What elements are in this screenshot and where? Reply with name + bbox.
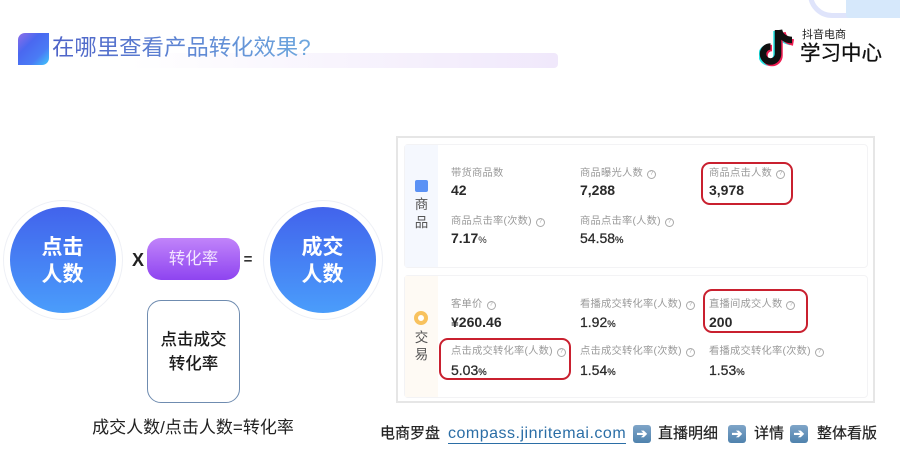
- section: 交易: [404, 275, 868, 398]
- metric: 商品曝光人数: 7,288: [580, 182, 615, 198]
- metric: 商品点击率(人数): 54.58%: [580, 230, 624, 246]
- metric: 商品点击率(次数): ?: [539, 219, 542, 225]
- metric: 客单价: 客单价: [451, 299, 482, 310]
- metric: 看播成交转化率(次数): 看播成交转化率(次数): [709, 346, 811, 357]
- callout: 点击成交转化率 highlight: [439, 338, 571, 380]
- metric: 客单价: ?: [489, 302, 493, 308]
- metric: 商品曝光人数: [580, 167, 656, 198]
- metric: 点击成交转化率(次数): ?: [689, 349, 692, 355]
- metric: 商品点击率(次数): 7.17%: [451, 230, 487, 246]
- metric: 看播成交转化率(次数): ?: [818, 349, 821, 355]
- metric: 客单价: [451, 298, 502, 330]
- multiply sign: X: [132, 250, 144, 270]
- circle label: 点击: [42, 236, 84, 258]
- metric: 带货商品数: [451, 167, 503, 198]
- arrow icon: [728, 425, 746, 443]
- metric: 看播成交转化率(次数): 1.53%: [709, 362, 745, 378]
- path: 详情: 详情: [754, 425, 784, 442]
- metric: 商品点击率(人数): ?: [668, 219, 671, 225]
- metric: 商品点击率(人数): [580, 215, 674, 246]
- metric: 直播间成交人数: [709, 298, 795, 330]
- metric: 点击成交转化率(人数): 点击成交转化率(人数): [451, 346, 553, 357]
- pill: 转化率: [147, 238, 240, 280]
- metric: 商品点击率(次数): [451, 215, 545, 246]
- metric: 带货商品数: 42: [451, 182, 467, 198]
- metric: 直播间成交人数: 直播间成交人数: [709, 299, 782, 310]
- path: 整体看版: 整体看版: [817, 425, 877, 442]
- metric: 商品点击率(次数): 商品点击率(次数): [451, 216, 532, 227]
- metric: 商品曝光人数: 商品曝光人数: [580, 168, 643, 179]
- callout: 商品点击人数 highlight: [701, 162, 793, 205]
- equals sign: =: [244, 251, 252, 268]
- arrow icon: ➔: [794, 426, 804, 441]
- arrow icon: ➔: [732, 426, 742, 441]
- section: 商品: [404, 144, 868, 268]
- formula text: 成交人数/点击人数=转化率: [92, 418, 294, 437]
- icon: music note: [759, 30, 794, 66]
- metric: 看播成交转化率(人数): [580, 298, 695, 330]
- metric: 点击成交转化率(人数): ?: [560, 349, 563, 355]
- metric: 点击成交转化率(次数): [580, 345, 695, 378]
- metric: 看播成交转化率(人数): 看播成交转化率(人数): [580, 299, 682, 310]
- metric: 看播成交转化率(次数): [709, 345, 824, 378]
- circle label: 成交: [302, 236, 344, 258]
- metric: 商品点击人数: 商品点击人数: [709, 168, 772, 179]
- panel: data screenshot: [396, 136, 875, 403]
- box: 点击成交转化率: 点击成交: [160, 331, 226, 349]
- pill: 转化率: 转化率: [169, 250, 218, 268]
- metric: 商品点击人数: 3,978: [709, 182, 744, 198]
- arrow icon: [633, 425, 651, 443]
- icon: shopping bag: [415, 180, 428, 192]
- circle label: [10, 206, 116, 312]
- metric: 客单价: ¥260.46: [451, 314, 502, 330]
- metric: 点击成交转化率(次数): 1.54%: [580, 362, 616, 378]
- box: 点击成交转化率: 转化率: [169, 355, 218, 373]
- title band: [130, 53, 558, 68]
- metric: 商品点击率(人数): 商品点击率(人数): [580, 216, 661, 227]
- metric: 点击成交转化率(次数): 点击成交转化率(次数): [580, 346, 682, 357]
- decorative shape: top right light panel: [846, 0, 900, 18]
- tab: 商品: [405, 145, 438, 267]
- metric: 点击成交转化率(人数): 5.03%: [451, 362, 487, 378]
- logo large text: 学习中心: [800, 42, 882, 65]
- tab: 交易: [405, 276, 438, 397]
- metric: 商品点击人数: [709, 167, 785, 198]
- metric: 看播成交转化率(人数): ?: [689, 302, 692, 308]
- metric: 点击成交转化率(人数): [451, 345, 566, 378]
- tab label: 交: [415, 330, 428, 345]
- icon: gold coin: [414, 311, 428, 325]
- tab label: 品: [415, 215, 428, 230]
- metric: 直播间成交人数: ?: [789, 302, 793, 308]
- logo: 抖音电商学习中心: [759, 28, 882, 66]
- metric: 商品点击人数: ?: [779, 171, 782, 177]
- metric: 看播成交转化率(人数): 1.92%: [580, 314, 616, 330]
- metric: 商品曝光人数: ?: [650, 171, 653, 177]
- circle label: 人数: [42, 262, 84, 286]
- arrow icon: [790, 425, 808, 443]
- title: 在哪里查看产品转化效果?: [52, 35, 311, 60]
- box: 点击成交转化率: [147, 300, 240, 403]
- circle: 成交人数: [263, 200, 383, 320]
- decorative shape: top right ring: [808, 0, 900, 18]
- path: 直播明细: 直播明细: [658, 425, 718, 442]
- metric: 直播间成交人数: 200: [709, 314, 732, 330]
- tab label: [415, 330, 428, 362]
- tab label: [415, 197, 428, 230]
- callout: 直播间成交人数 highlight: [703, 289, 808, 333]
- arrow icon: ➔: [637, 426, 647, 441]
- metric: 带货商品数: 带货商品数: [451, 168, 503, 179]
- logo small text: 抖音电商: [802, 29, 846, 41]
- tab label: 易: [415, 347, 428, 362]
- icon: title square: [18, 33, 49, 65]
- circle label: 人数: [302, 262, 344, 286]
- path: 电商罗盘: 电商罗盘: [380, 425, 440, 442]
- circle: 点击人数: [3, 200, 123, 320]
- tab label: 商: [415, 197, 428, 212]
- link: compass: compass.jinritemai.com: [448, 425, 626, 442]
- circle label: [270, 206, 376, 312]
